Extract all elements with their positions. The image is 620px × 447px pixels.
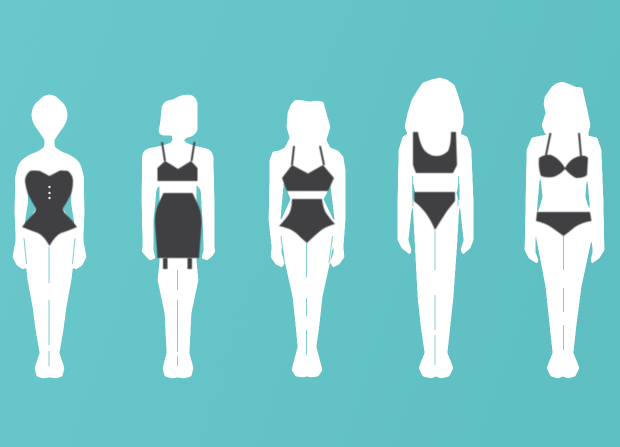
- silhouette 4: [398, 78, 473, 378]
- leg and arm gaps 1: [24, 238, 75, 366]
- bikini briefs: [536, 212, 592, 236]
- figure 3: bra and high-waist briefs: [269, 100, 345, 377]
- leg and arm gaps 3: [281, 236, 332, 355]
- long-line girdle: [155, 193, 202, 258]
- underwire bra: [539, 133, 588, 178]
- leg gap 5: [562, 236, 564, 350]
- bra: [158, 142, 198, 181]
- figure 4: sports bra and briefs: [398, 78, 473, 378]
- leg and arm gaps 4: [412, 176, 458, 365]
- corset buttons: [48, 186, 51, 199]
- figure 2: bra and long girdle: [142, 95, 215, 378]
- figure 5: underwire bra and bikini: [525, 82, 604, 378]
- silhouette 1: [13, 95, 86, 378]
- leg gap 2: [176, 270, 178, 366]
- high-waist briefs: [279, 199, 335, 243]
- garters: [163, 258, 192, 269]
- corset: [22, 170, 77, 246]
- figure 1: corset: [13, 95, 86, 378]
- bra: [282, 146, 334, 191]
- silhouette 3: [269, 100, 345, 377]
- sports bra: [413, 132, 457, 173]
- silhouette 2: [142, 95, 215, 378]
- silhouette 5: [525, 82, 604, 378]
- briefs: [414, 192, 455, 230]
